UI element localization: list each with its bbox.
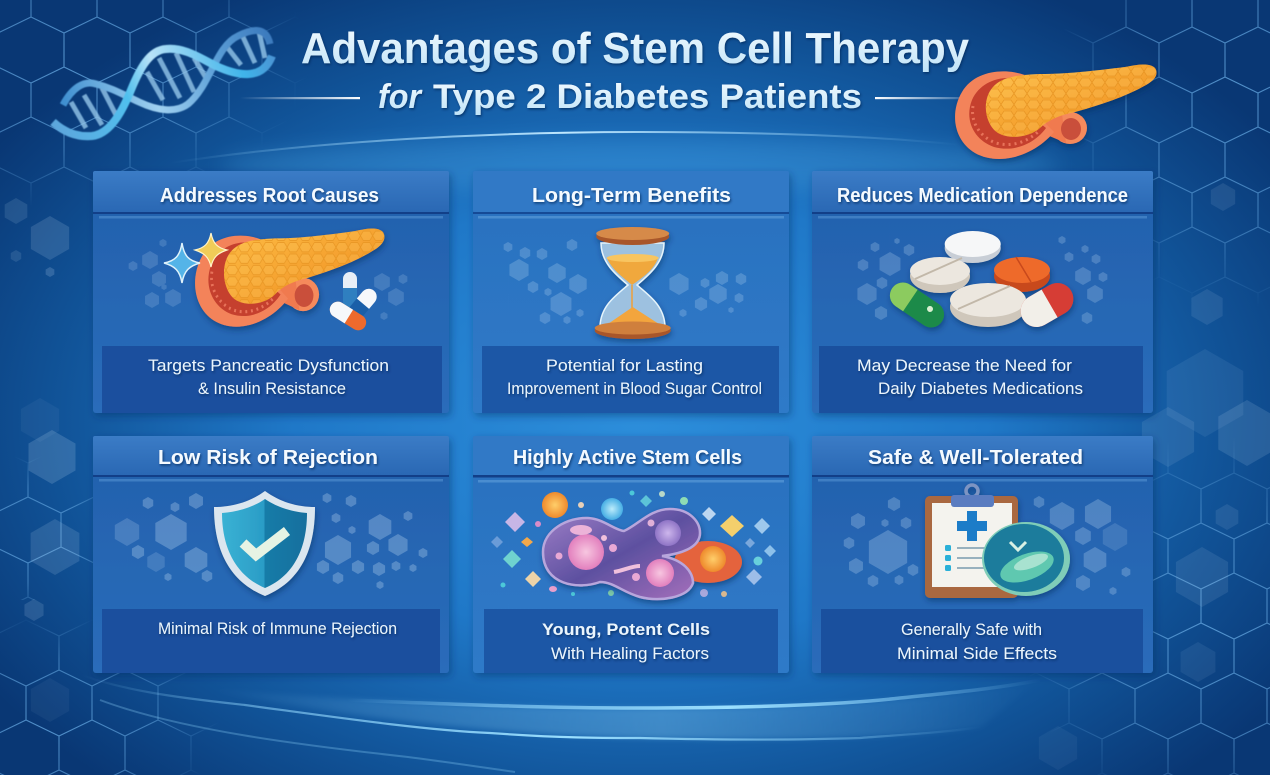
description: Potential for Lasting [546, 356, 703, 375]
panel: Highly Active Stem Cells [473, 436, 789, 673]
card heading [473, 436, 789, 482]
description [819, 346, 1143, 413]
panel: Addresses Root Causes [93, 171, 449, 413]
subtitle: for: for [378, 78, 423, 116]
description: May Decrease the Need for [857, 356, 1072, 375]
card heading: Safe & Well-Tolerated [868, 447, 1083, 469]
decorative hexagons [844, 496, 1130, 595]
card heading [93, 436, 449, 482]
decorative hexagons [504, 239, 746, 324]
icon: yellow sparkle [195, 233, 227, 267]
panel: Low Risk of Rejection [93, 436, 449, 673]
icon: stem cells and particles [491, 490, 776, 599]
icon: capsules [327, 272, 380, 333]
description: & Insulin Resistance [198, 379, 346, 398]
card heading: Low Risk of Rejection [158, 447, 378, 469]
card heading [812, 171, 1153, 218]
card heading: Highly Active Stem Cells [513, 447, 742, 469]
title: Advantages of Stem Cell Therapy [301, 24, 970, 73]
panel: Reduces Medication Dependence [812, 171, 1153, 413]
icon: blue sparkle [164, 243, 200, 283]
description: Minimal Risk of Immune Rejection [158, 619, 397, 638]
icon: header pancreas [955, 60, 1160, 159]
top swoosh arc [170, 132, 1060, 191]
description [821, 609, 1143, 673]
title [240, 24, 970, 116]
description: Young, Potent Cells [542, 620, 710, 639]
panel: Safe & Well-Tolerated [812, 436, 1153, 673]
description: With Healing Factors [551, 644, 709, 663]
card heading: Long-Term Benefits [532, 185, 731, 207]
icon: shield with check [214, 491, 315, 596]
description: Targets Pancreatic Dysfunction [148, 356, 389, 375]
description: Daily Diabetes Medications [878, 379, 1083, 398]
decorative hexagons [857, 236, 1107, 324]
description [102, 609, 440, 673]
card heading: Reduces Medication Dependence [837, 185, 1128, 207]
card heading: Addresses Root Causes [160, 185, 379, 207]
icon: DNA helix [53, 31, 272, 136]
description [484, 609, 778, 673]
icon: pills [885, 231, 1079, 333]
card heading [473, 171, 789, 218]
description: Improvement in Blood Sugar Control [507, 379, 762, 398]
decorative hexagons [129, 239, 407, 320]
icon: pancreas [195, 224, 388, 327]
description [482, 346, 779, 413]
icon: clipboard with pill badge [925, 485, 1070, 598]
bottom swoosh bands [82, 675, 1041, 772]
panel: Long-Term Benefits [473, 171, 789, 413]
left title rule [240, 97, 360, 99]
description: Generally Safe with [901, 620, 1042, 639]
description: Minimal Side Effects [897, 644, 1057, 663]
card heading [812, 436, 1153, 482]
card heading [93, 171, 449, 218]
decorative hexagons [115, 493, 427, 589]
icon: hourglass [595, 227, 671, 339]
right title rule [875, 97, 960, 99]
subtitle: type 2 diabetes patients: Type 2 Diabetes Patients [433, 78, 862, 116]
description [102, 346, 442, 413]
